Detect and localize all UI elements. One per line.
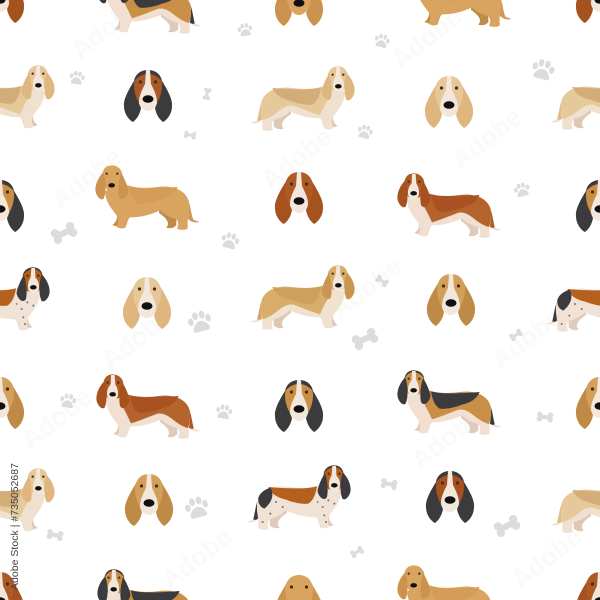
face: tan: [427, 274, 475, 326]
face: bottom left red: [0, 572, 24, 600]
face: black eared: [124, 70, 172, 122]
watermark pattern: Adobe: [325, 251, 407, 325]
dog: cream right edge: [551, 65, 600, 130]
face: top right red: [576, 0, 600, 23]
face: red: [275, 172, 323, 224]
face: gold with blaze: [125, 474, 173, 526]
watermark pattern: Adobe: [385, 1, 467, 75]
paw prints: [59, 22, 556, 520]
watermark pattern: Adobe: [405, 401, 487, 475]
stock credit: Adobe Stock | #735052687: [9, 463, 21, 590]
dog: spotted centre: [247, 465, 351, 530]
face: black eared red: [426, 471, 474, 523]
watermark pattern: Adobe: [45, 141, 127, 215]
dog: red and white lower: [96, 374, 200, 439]
dog: gold bottom: [397, 565, 501, 600]
watermark pattern: Adobe: [445, 101, 527, 175]
watermark pattern: Adobe: [95, 301, 177, 375]
dog: tricolor bottom: [97, 569, 201, 600]
dog: cream centre: [251, 66, 355, 131]
dog: gold: [95, 165, 199, 230]
face: cream lower: [123, 277, 171, 329]
dog: tricolor top: [97, 0, 201, 34]
watermark pattern: Adobe: [255, 121, 337, 195]
dog: red and white: [397, 173, 501, 238]
dog: spotted left edge: [0, 267, 50, 332]
watermark pattern: Adobe: [15, 381, 97, 455]
bones: [46, 87, 554, 559]
watermark pattern: Adobe: [505, 521, 587, 595]
dog: cream left edge: [0, 65, 55, 130]
face: left edge black eared: [0, 180, 24, 232]
face: gold bottom centre: [275, 575, 323, 600]
dog: cream lower left edge: [0, 468, 55, 533]
face: right edge black eared: [576, 180, 600, 232]
face: left edge gold: [0, 377, 24, 429]
face: bottom right red: [576, 572, 600, 600]
dog: spotted right edge: [546, 267, 600, 332]
dog: tan centre: [251, 265, 355, 330]
face: cream: [425, 76, 473, 128]
dog: cream lower right edge: [551, 468, 600, 533]
face: black eared centre: [275, 380, 323, 432]
face: gold top centre: [275, 0, 323, 26]
dog: tricolor lower: [397, 370, 501, 435]
watermark pattern: Adobe: [485, 301, 567, 375]
face: right edge gold: [576, 377, 600, 429]
dog: gold top right: [407, 0, 511, 27]
watermark pattern: Adobe: [155, 521, 237, 595]
face: top left red: [0, 0, 24, 23]
